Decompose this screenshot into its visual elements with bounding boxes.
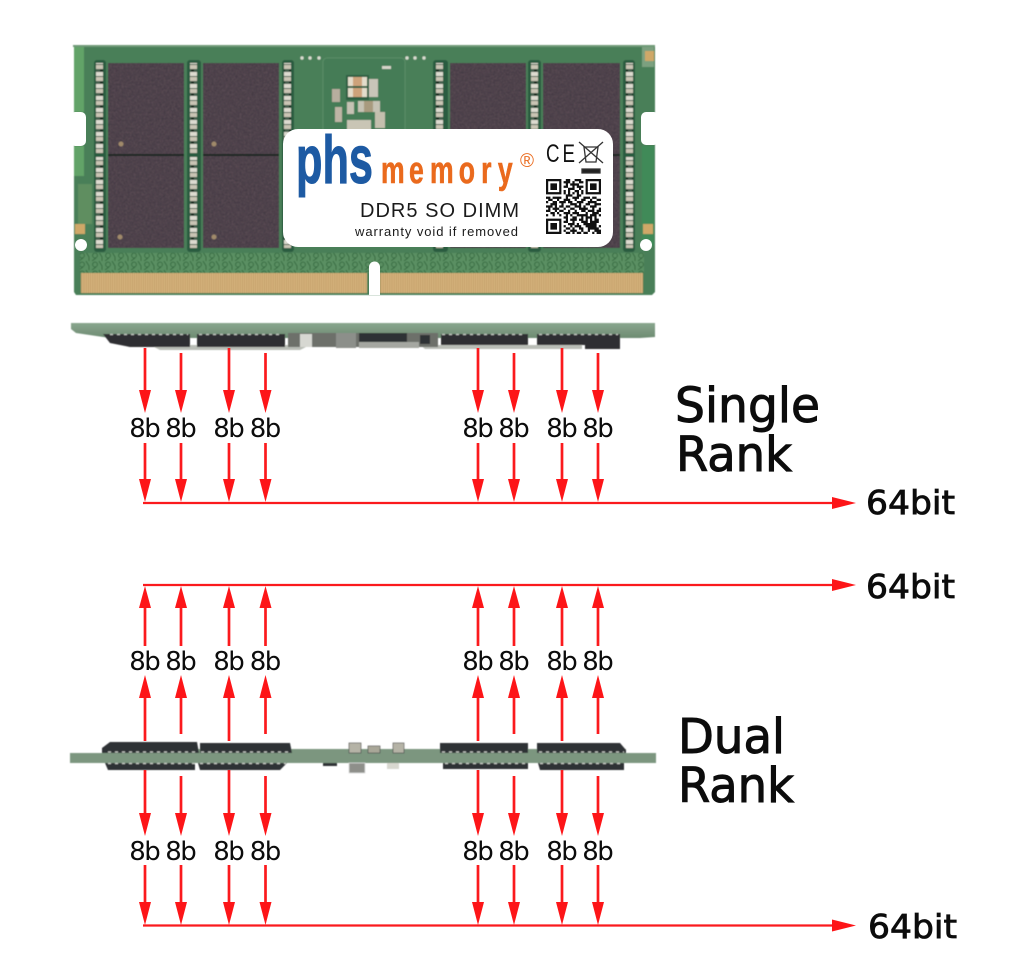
lane 5: 8b	[462, 647, 493, 677]
warranty note: warranty void if removed	[354, 224, 518, 239]
PCB edge	[70, 749, 656, 763]
centre components	[323, 743, 404, 773]
panel: single rank bus arrows	[129, 348, 856, 509]
lane 3: 8b	[213, 837, 244, 867]
lane 6: 8b	[498, 414, 529, 444]
trace pattern	[80, 253, 644, 273]
lane 1	[129, 586, 160, 741]
module photo layer	[73, 45, 655, 295]
lane 3: 8b	[213, 647, 244, 677]
heading: Dual Rank: Dual	[678, 709, 785, 765]
lane 2	[165, 776, 196, 925]
test point dots	[300, 56, 426, 60]
lane 4: 8b	[250, 414, 281, 444]
chip pin-one dots	[118, 142, 216, 240]
panel: single rank module side view	[71, 323, 655, 350]
lane 8: 8b	[582, 414, 613, 444]
lane 2: 8b	[165, 647, 196, 677]
PCB edge	[71, 323, 655, 338]
lane 7: 8b	[546, 414, 577, 444]
lane 6	[498, 776, 529, 925]
resistor strips	[96, 63, 633, 248]
icon: WEEE crossed-out bin	[579, 142, 603, 173]
lane 7	[546, 586, 577, 741]
lane 3	[213, 586, 244, 741]
lane 5: 8b	[462, 837, 493, 867]
lane 5	[462, 348, 493, 502]
bus label: dual rank lower 64bit: 64bit	[868, 907, 957, 946]
centre components	[288, 333, 438, 348]
lane 1: 8b	[129, 837, 160, 867]
lane 6	[498, 353, 529, 502]
memory chips	[108, 63, 620, 248]
panel: dual rank upper bus arrows	[129, 579, 856, 741]
lane 1	[129, 770, 160, 925]
lane 8: 8b	[582, 837, 613, 867]
lane 5: 8b	[462, 414, 493, 444]
lane 7: 8b	[546, 647, 577, 677]
power management components	[323, 58, 405, 133]
lane 2: 8b	[165, 837, 196, 867]
lane 5	[462, 770, 493, 925]
board edge highlights	[73, 45, 655, 246]
lane 2	[165, 353, 196, 502]
lane 8	[582, 776, 613, 925]
chip shadows and resistor bands	[94, 60, 635, 252]
product name: DDR5 SO DIMM	[360, 200, 519, 222]
lane 6	[498, 586, 529, 734]
bus arrow	[143, 579, 856, 591]
logo: phs: phs	[296, 122, 373, 198]
gold contact fingers	[81, 273, 643, 293]
heading: Single Rank: Rank	[676, 427, 792, 483]
lane 3	[213, 348, 244, 502]
CE mark: CE	[546, 139, 575, 168]
heading: Dual Rank	[678, 709, 794, 814]
lane 3	[213, 770, 244, 925]
lane 4	[250, 586, 281, 734]
lane 8	[582, 586, 613, 734]
bus label: dual rank upper 64bit: 64bit	[866, 567, 955, 606]
lane 7	[546, 348, 577, 502]
lane 4: 8b	[250, 647, 281, 677]
lower chips	[105, 763, 624, 770]
left chips	[103, 334, 285, 347]
lane 1: 8b	[129, 414, 160, 444]
lane 2: 8b	[165, 414, 196, 444]
lane 7: 8b	[546, 837, 577, 867]
bus arrow	[143, 920, 856, 932]
right chips	[441, 334, 620, 349]
chip lead highlights	[110, 334, 618, 336]
panel: DDR5 SO DIMM module top view	[70, 45, 659, 295]
registered mark: ®	[520, 151, 534, 172]
lane 1	[129, 348, 160, 502]
panel: dual rank lower bus arrows	[129, 770, 856, 932]
lane 4	[250, 353, 281, 502]
bus arrow	[143, 497, 856, 509]
upper chips	[102, 742, 626, 753]
lane 3: 8b	[213, 414, 244, 444]
lane 5	[462, 586, 493, 741]
label background	[283, 129, 613, 247]
lane 4: 8b	[250, 837, 281, 867]
lane 7	[546, 770, 577, 925]
metal underside strips	[150, 345, 582, 350]
heading: Single Rank	[675, 378, 820, 483]
lane 6: 8b	[498, 837, 529, 867]
logo: memory: memory	[381, 148, 513, 191]
heading: Dual Rank: Rank	[678, 758, 794, 814]
lane 8	[582, 353, 613, 502]
QR code	[546, 180, 601, 233]
lane 1: 8b	[129, 647, 160, 677]
heading: Single Rank: Single	[675, 378, 820, 434]
lane 8: 8b	[582, 647, 613, 677]
bus label: single rank 64bit: 64bit	[866, 483, 955, 522]
product label	[283, 122, 613, 247]
chip divider lines	[108, 154, 620, 156]
PCB board	[74, 45, 655, 295]
lane 2	[165, 586, 196, 734]
lane 6: 8b	[498, 647, 529, 677]
board notches and mounting holes	[70, 112, 659, 295]
edge trace band	[80, 253, 644, 273]
lane 4	[250, 776, 281, 925]
chip lead highlights	[108, 752, 624, 764]
panel: dual rank module side view	[70, 742, 656, 773]
